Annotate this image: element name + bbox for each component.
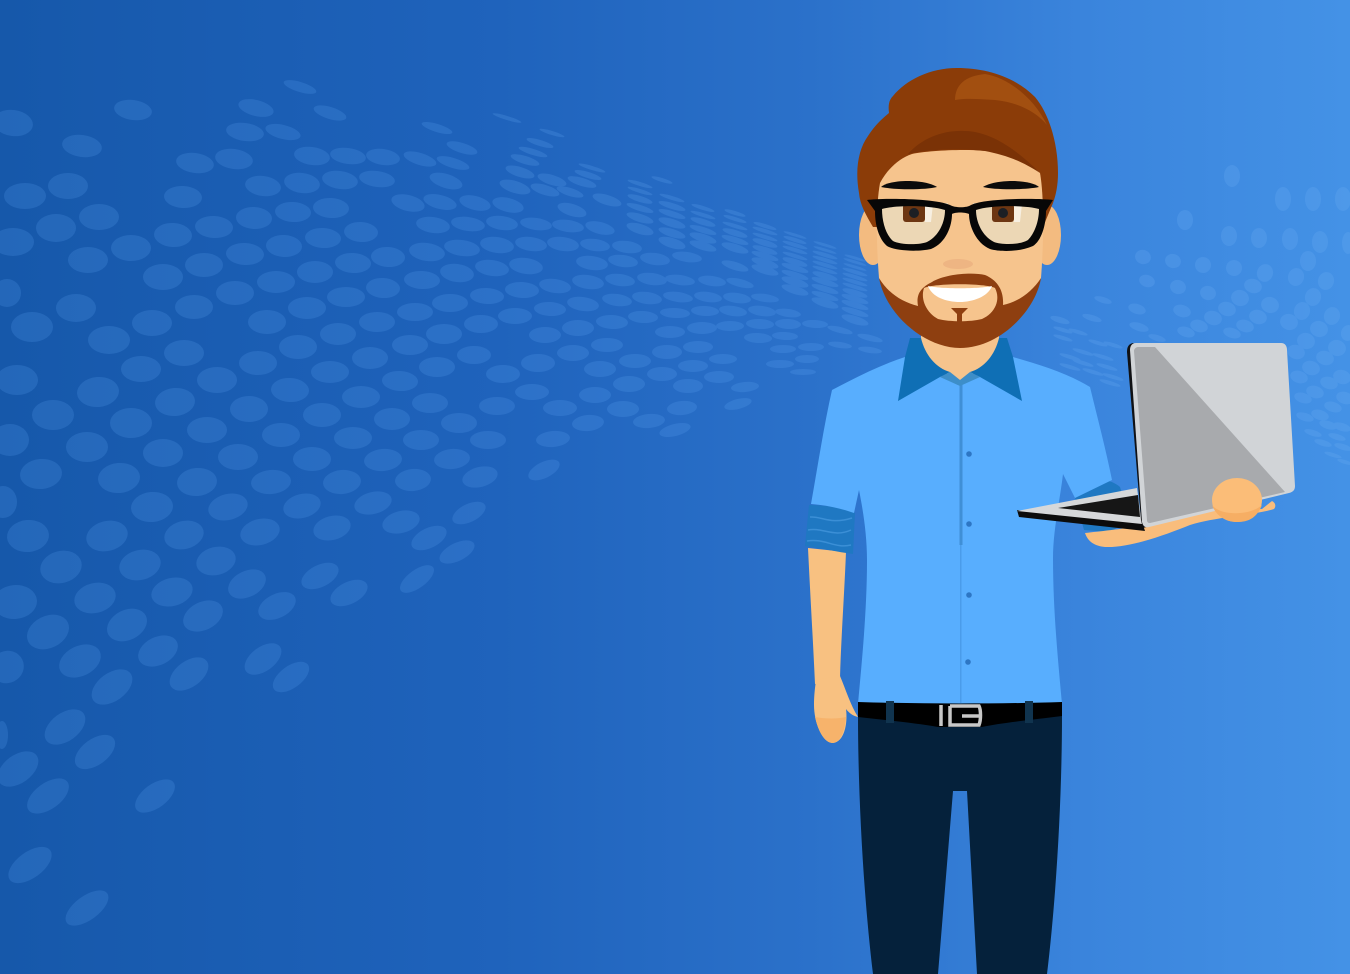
- nose: [943, 259, 973, 269]
- laptop lid edge: [1127, 343, 1150, 528]
- laptop: [1017, 343, 1295, 531]
- lenses: [878, 203, 948, 248]
- dots: right of the head: [1050, 294, 1166, 388]
- laptop base: [1017, 488, 1142, 524]
- character: man with beard and glasses: [805, 68, 1295, 974]
- shirt: [811, 357, 1112, 704]
- belt: [858, 701, 1062, 727]
- hand on laptop: [1212, 478, 1262, 522]
- neck: [921, 325, 999, 385]
- dots: thin stripes fading toward the figure: [492, 112, 883, 355]
- shirt placket: [960, 385, 962, 545]
- laptop base underside: [1017, 510, 1145, 531]
- dots: left upper field: [0, 77, 406, 395]
- dots: left lower field: [0, 370, 515, 932]
- ears: [859, 205, 1061, 265]
- goatee patch: [951, 308, 968, 322]
- left arm: [808, 548, 846, 684]
- face: [877, 150, 1043, 348]
- chin skin area: [923, 284, 997, 321]
- laptop lid shadow triangle: [1134, 347, 1285, 523]
- belt buckle: [941, 705, 980, 726]
- dark fringe: [908, 131, 1040, 173]
- eyebrows: [881, 181, 1039, 189]
- laptop keyboard: [1058, 495, 1140, 517]
- beard: [879, 274, 1041, 348]
- dots: middle field: [390, 119, 828, 485]
- glasses: [867, 199, 1053, 251]
- dots: upper right cluster: [1133, 165, 1350, 466]
- hair back: [857, 68, 1058, 227]
- crown highlight: [955, 74, 1047, 125]
- laptop lid: [1130, 343, 1295, 527]
- shirt buttons: [965, 451, 972, 665]
- left hand: [814, 676, 858, 743]
- trousers: [858, 715, 1062, 974]
- rolled left cuff: [805, 505, 855, 554]
- left hand lower shadow: [815, 717, 846, 743]
- smile teeth: [928, 286, 992, 302]
- forearm holding laptop: [1085, 501, 1275, 547]
- eyes: [903, 204, 1022, 222]
- collar: [898, 338, 1022, 401]
- belt loops: [886, 701, 894, 723]
- frame: [867, 199, 1053, 251]
- right cuff behind laptop: [1075, 481, 1130, 532]
